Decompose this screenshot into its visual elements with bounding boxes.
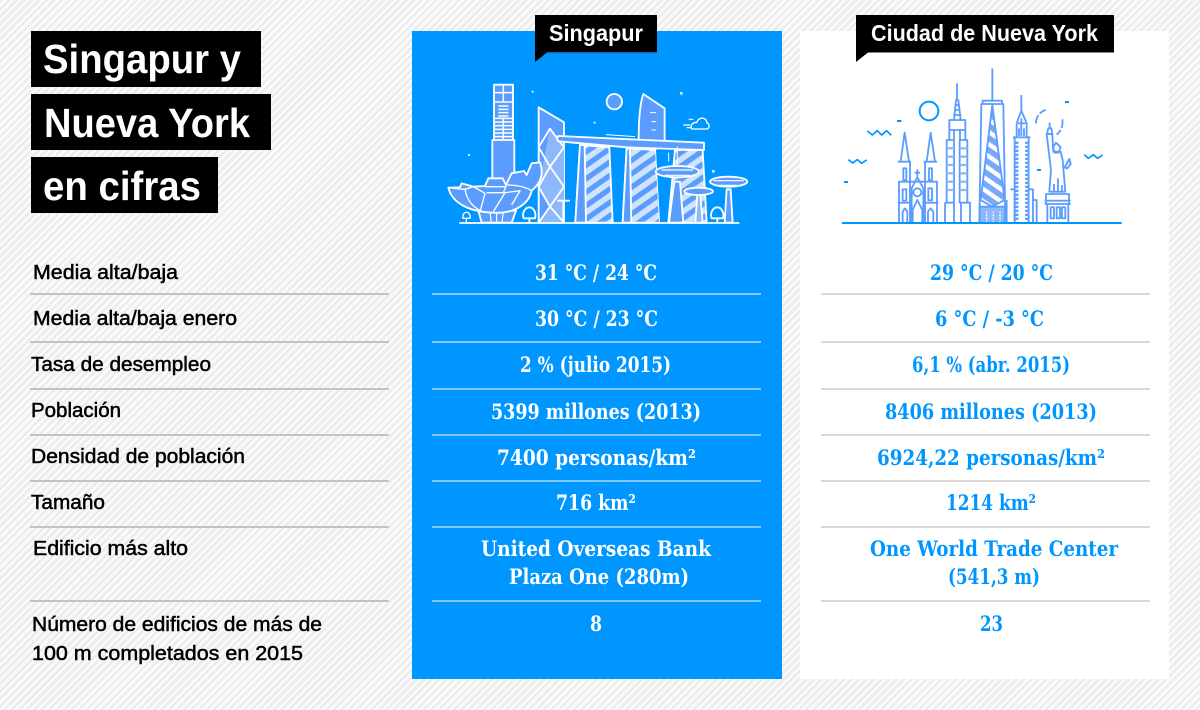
row labels: Media alta/baja (33, 261, 179, 284)
row labels: Tasa de desempleo (31, 353, 211, 376)
column: Singapur values: 31 °C / 24 °C (535, 261, 657, 286)
column: Nueva York values: 23 (980, 612, 1003, 637)
column: Singapur values: 8 (590, 612, 602, 637)
row labels (31, 261, 322, 665)
tag: Singapur (535, 15, 657, 62)
column: Nueva York values (870, 261, 1119, 637)
title: Singapur y (43, 36, 241, 82)
column: Nueva York values: (541,3 m) (948, 565, 1040, 590)
title: en cifras (43, 163, 201, 209)
column: Nueva York values: 6 °C / -3 °C (935, 307, 1044, 332)
column: Nueva York values: 6924,22 personas/km² (877, 446, 1105, 471)
row labels: Media alta/baja enero (33, 307, 237, 330)
title: Nueva York (44, 100, 250, 146)
title (31, 31, 271, 213)
row labels: 100 m completados en 2015 (32, 642, 303, 665)
panel: Ciudad de Nueva York (800, 15, 1169, 679)
row labels: Población (31, 399, 121, 422)
lotus building (448, 162, 542, 223)
column: Nueva York values: One World Trade Center (870, 537, 1119, 562)
row labels: Tamaño (31, 491, 105, 514)
column: Singapur values: 7400 personas/km² (497, 446, 696, 471)
column: Nueva York values: 1214 km² (946, 491, 1036, 516)
tag: Ciudad de Nueva York: Ciudad de Nueva York (871, 20, 1098, 46)
panel: Singapur (412, 15, 782, 679)
column: Singapur values: United Overseas Bank (481, 537, 712, 562)
row labels: Número de edificios de más de (32, 613, 322, 636)
column: Singapur values: 2 % (julio 2015) (520, 353, 671, 378)
column: Nueva York values: 29 °C / 20 °C (930, 261, 1053, 286)
column: Nueva York values: 6,1 % (abr. 2015) (912, 353, 1070, 378)
row labels: Edificio más alto (33, 537, 188, 560)
column: Singapur values: 30 °C / 23 °C (535, 307, 658, 332)
tag: Singapur: Singapur (549, 20, 643, 46)
column: Singapur values: 716 km² (556, 491, 636, 516)
illustration: Singapur skyline (448, 85, 747, 223)
column: Singapur values: 5399 millones (2013) (491, 400, 701, 425)
row labels: Densidad de población (31, 445, 245, 468)
column: Nueva York values: 8406 millones (2013) (885, 400, 1097, 425)
column: Singapur values: Plaza One (280m) (509, 565, 689, 590)
tag: Ciudad de Nueva York (856, 15, 1114, 62)
sun (920, 102, 938, 120)
column: Singapur values (481, 261, 712, 637)
illustration: Nueva York skyline (842, 68, 1122, 223)
